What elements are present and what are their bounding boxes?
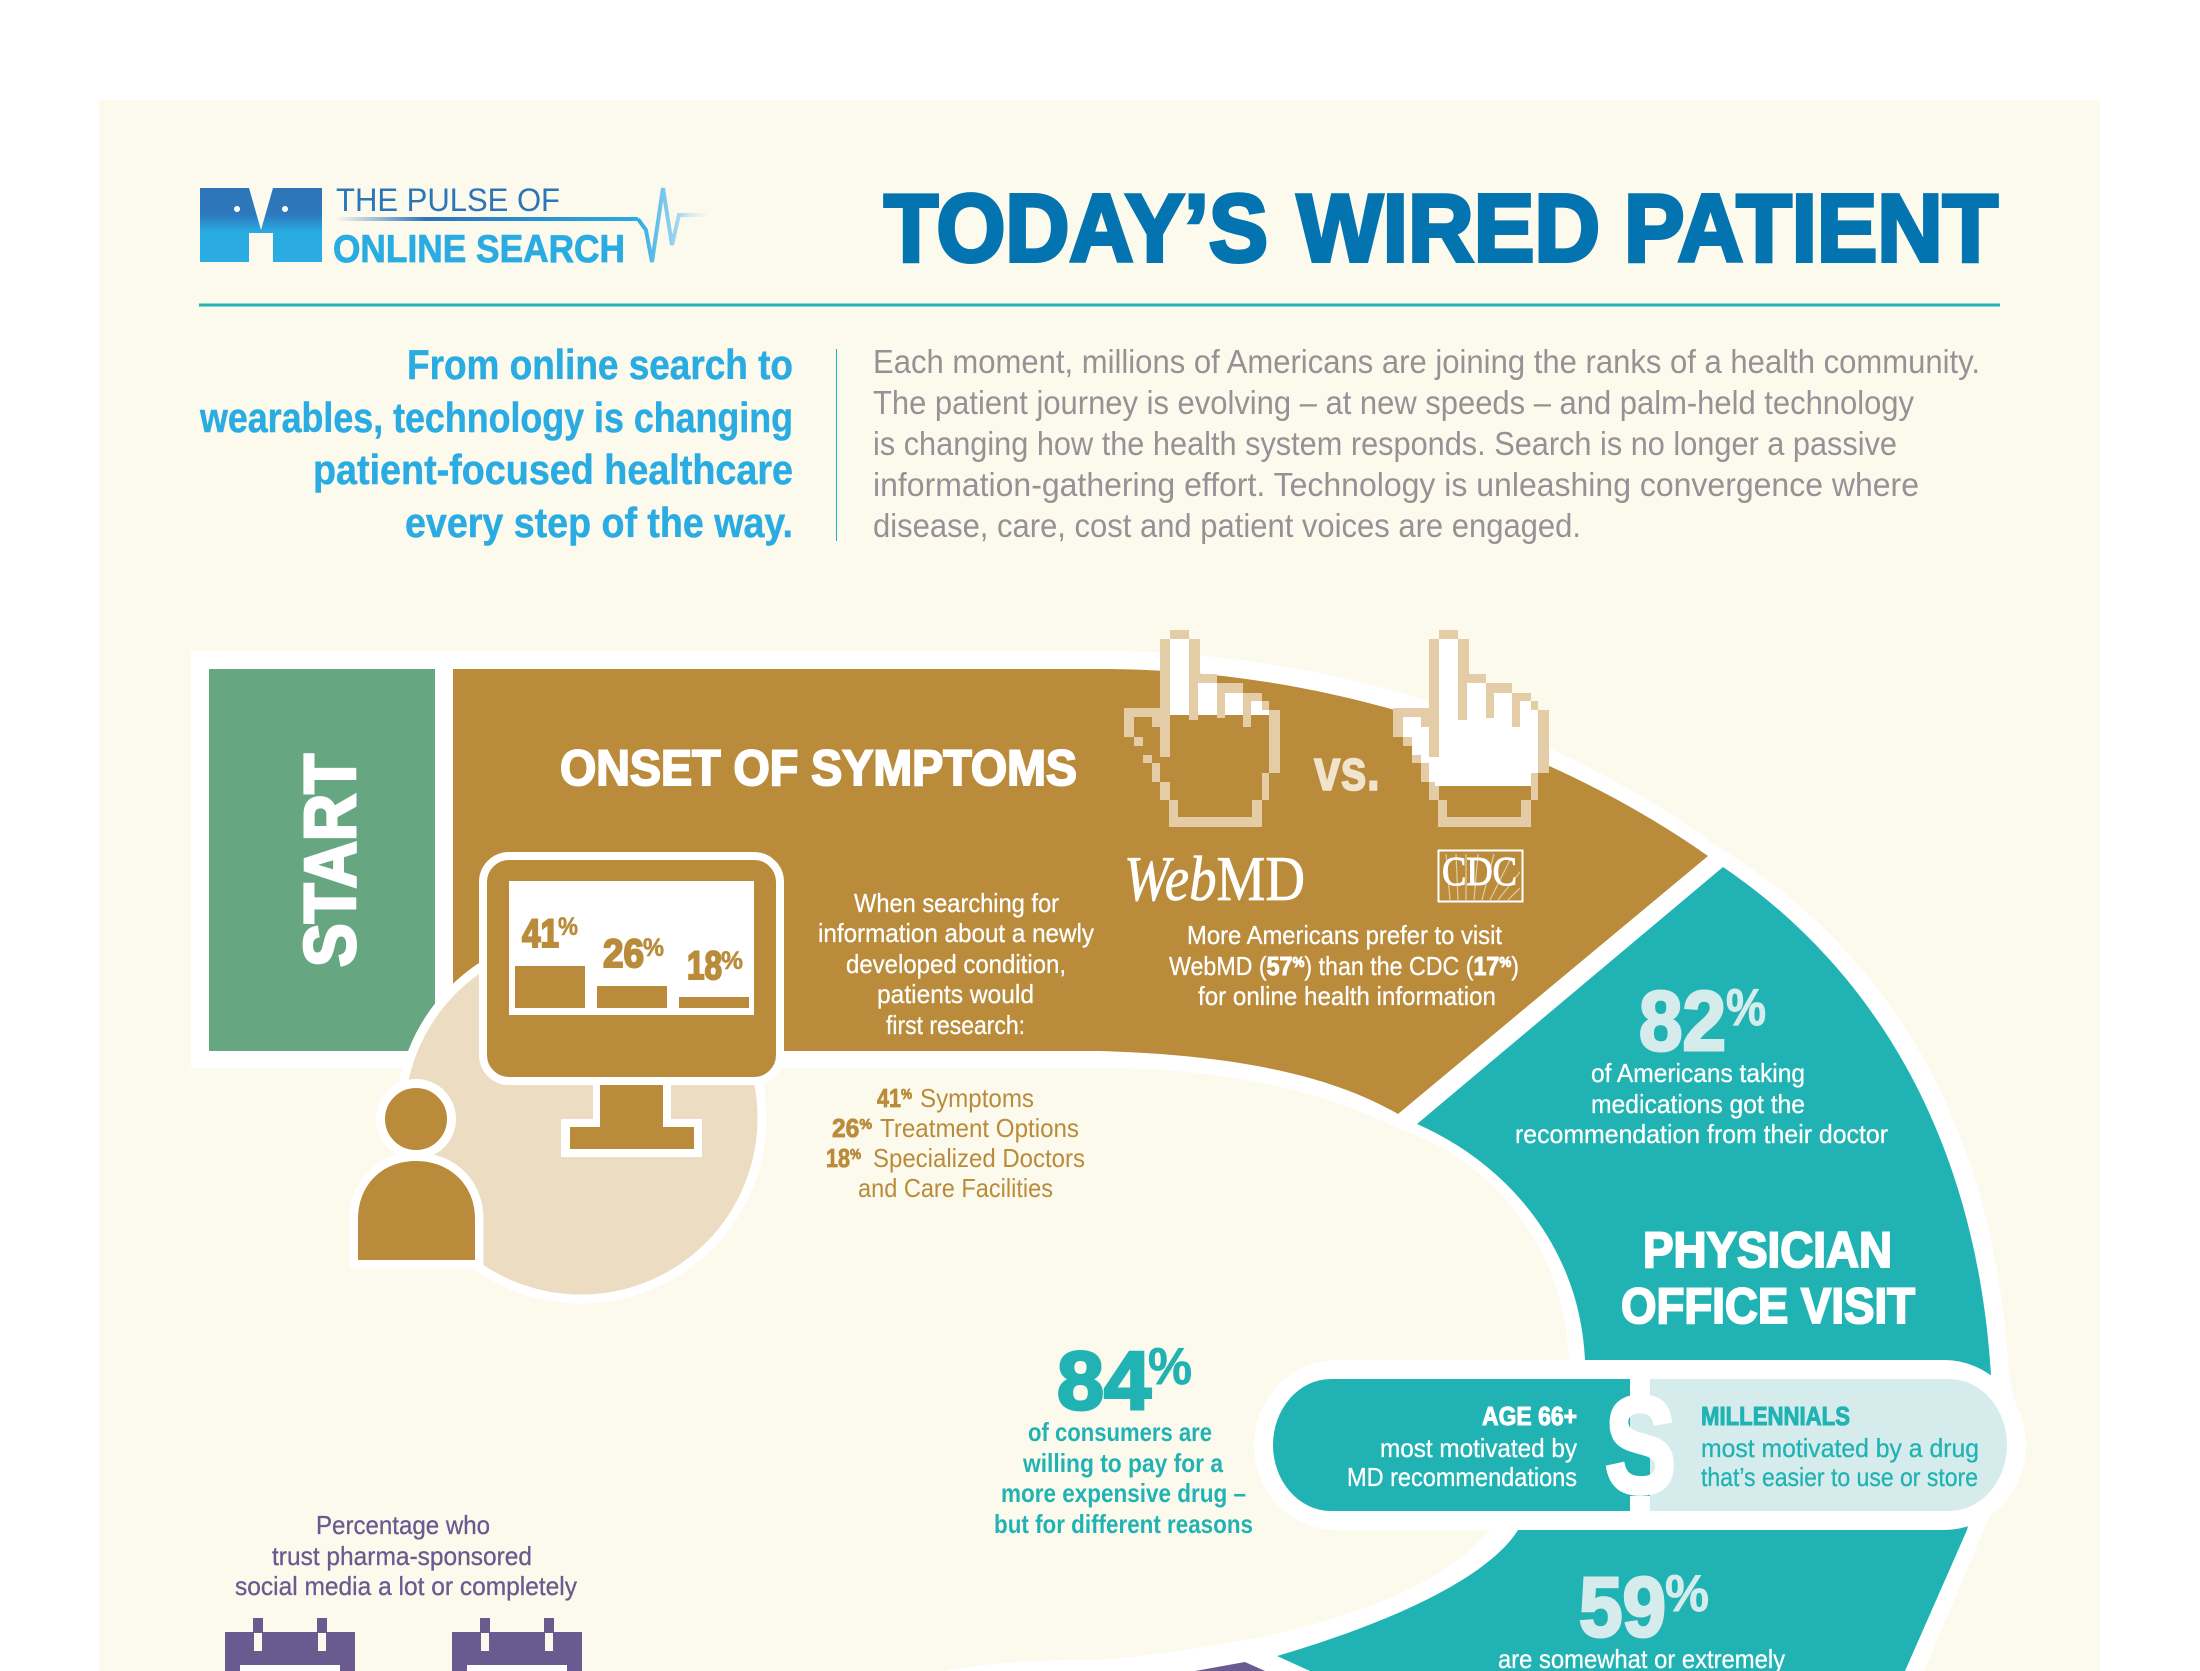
icon: monitor with bar chart [483, 856, 780, 1157]
text: WebMD vs CDC: ) [1511, 951, 1519, 981]
text: when searching: patients would [877, 979, 1034, 1009]
intro paragraph: information-gathering effort. Technology is unleashing convergence where [873, 466, 1919, 503]
logo mark: M [200, 188, 322, 262]
subtitle: wearables, technology is changing [199, 394, 793, 441]
icon: calendar 2 [452, 1618, 582, 1671]
pill right text: MILLENNIALS [1701, 1401, 1850, 1431]
stat: 59%: % [1665, 1565, 1709, 1623]
text: when searching: first research: [886, 1010, 1025, 1040]
text: WebMD vs CDC: % [1292, 954, 1304, 971]
icon: CDC hand cursor [1393, 630, 1549, 827]
S counters [1629, 1396, 1651, 1496]
legend: research topics: % [859, 1116, 872, 1133]
bar chart: % [643, 934, 664, 962]
bar chart: % [558, 913, 578, 941]
text: WebMD vs CDC: WebMD (57 [1169, 951, 1296, 981]
intro paragraph [873, 343, 1980, 544]
intro paragraph: Each moment, millions of Americans are joining the ranks of a health community. [873, 343, 1980, 380]
bar chart [515, 912, 749, 1008]
legend: research topics: Specialized Doctors [873, 1143, 1085, 1173]
logo: The Pulse of Online Search [200, 182, 706, 271]
text: 82% detail: recommendation from their doctor [1515, 1119, 1888, 1149]
text: 82% detail: medications got the [1591, 1089, 1805, 1119]
text: WebMD vs CDC: More Americans prefer to visit [1187, 920, 1503, 950]
heading: physician office visit: OFFICE VISIT [1621, 1278, 1915, 1334]
stat: 84%: 84 [1057, 1334, 1151, 1427]
logo text: online search: ONLINE SEARCH [333, 228, 625, 271]
legend: research topics: % [850, 1146, 861, 1163]
stat: 82%: 82 [1639, 974, 1726, 1068]
pill right half [1650, 1379, 2007, 1511]
text: when searching: developed condition, [846, 949, 1066, 979]
logo text: the pulse of: THE PULSE OF [336, 182, 560, 218]
beige circle behind monitor [400, 937, 762, 1299]
logo: CDC: CDC [1442, 848, 1517, 894]
text: when searching [818, 888, 1094, 1040]
bar chart: % [721, 947, 743, 975]
logo: WebMD: WebMD [1124, 843, 1305, 914]
pill: age vs millennials [1254, 1360, 2026, 1530]
stat: 82%: % [1726, 979, 1766, 1037]
vs label: vs. [1314, 738, 1380, 803]
purple band sliver [1195, 1662, 1265, 1671]
pill left text [1347, 1401, 1577, 1492]
text: 84% detail: but for different reasons [994, 1509, 1253, 1539]
monitor body [483, 856, 780, 1081]
pill right text: that’s easier to use or store [1701, 1462, 1978, 1492]
bar chart: 18 [687, 944, 722, 988]
text: WebMD vs CDC: ) than the CDC ( [1304, 951, 1474, 981]
text: when searching: When searching for [854, 888, 1059, 918]
icon: WebMD hand cursor [1124, 630, 1280, 827]
text: 82% detail [1515, 1058, 1888, 1149]
legend: research topics [826, 1083, 1085, 1203]
panel: lower teal band [1277, 1500, 1975, 1671]
text: 84% detail: willing to pay for a [1022, 1448, 1223, 1478]
pill left half [1273, 1379, 1630, 1511]
text: 82% detail: of Americans taking [1591, 1058, 1805, 1088]
white journey path backing [191, 651, 2026, 1671]
text: percentage who trust: trust pharma-sponsored [272, 1541, 532, 1571]
stat: 84% [1057, 1334, 1192, 1427]
subtitle: patient-focused healthcare [313, 446, 793, 493]
legend: research topics: % [901, 1086, 912, 1103]
bar chart: 41 [522, 912, 559, 956]
text: WebMD vs CDC: % [1499, 954, 1511, 971]
pill right text: most motivated by a drug [1701, 1433, 1979, 1463]
stat: 59%: 59 [1579, 1560, 1666, 1654]
text: percentage who trust: Percentage who [316, 1510, 490, 1540]
pill right text [1701, 1401, 1979, 1492]
text: WebMD vs CDC: 17 [1473, 951, 1511, 981]
text: 84% detail: of consumers are [1028, 1417, 1212, 1447]
legend: research topics: and Care Facilities [858, 1173, 1053, 1203]
heading: onset of symptoms: ONSET OF SYMPTOMS [560, 740, 1077, 796]
title: TODAY’S [884, 175, 1268, 282]
text: percentage who trust [235, 1510, 577, 1601]
text: when searching: information about a newly [818, 918, 1094, 948]
legend: research topics: 41 [877, 1083, 906, 1113]
dollar S: S [1605, 1369, 1676, 1521]
legend: research topics: Symptoms [920, 1083, 1034, 1113]
panel: physician office visit [1417, 867, 1991, 1400]
title [884, 175, 1998, 282]
icon: calendar 1 [225, 1618, 355, 1671]
text: 84% detail [994, 1417, 1253, 1539]
text: WebMD vs CDC [1169, 920, 1519, 1011]
legend: research topics: Treatment Options [880, 1113, 1079, 1143]
monitor screen [509, 881, 754, 1015]
monitor stand [561, 1080, 702, 1157]
legend: research topics: 26 [832, 1113, 861, 1143]
logo pulse line [335, 188, 706, 262]
panel: onset of symptoms [453, 669, 1708, 1114]
icon: person [358, 1084, 475, 1260]
bar chart: 26 [603, 932, 644, 976]
subtitle: From online search to [407, 341, 793, 388]
stat: 84%: % [1148, 1338, 1192, 1396]
subtitle: every step of the way. [405, 499, 793, 546]
text: WebMD vs CDC: for online health information [1198, 981, 1496, 1011]
text: 84% detail: more expensive drug – [1001, 1478, 1246, 1508]
panel: start [209, 669, 435, 1051]
title: PATIENT [1624, 175, 1998, 282]
text: percentage who trust: social media a lot or completely [235, 1571, 577, 1601]
legend: research topics: 18 [826, 1143, 855, 1173]
heading: physician office visit: PHYSICIAN [1643, 1222, 1892, 1278]
intro paragraph: The patient journey is evolving – at new speeds – and palm-held technology [873, 384, 1914, 421]
pill left text: most motivated by [1380, 1433, 1577, 1463]
title: WIRED [1297, 175, 1600, 282]
intro paragraph: is changing how the health system responds. Search is no longer a passive [873, 425, 1897, 462]
heading: physician office visit [1621, 1222, 1915, 1334]
intro paragraph: disease, care, cost and patient voices are engaged. [873, 507, 1581, 544]
pill left text: AGE 66+ [1482, 1401, 1577, 1431]
pill left text: MD recommendations [1347, 1462, 1577, 1492]
subtitle [199, 341, 793, 546]
start label: START [291, 754, 371, 967]
